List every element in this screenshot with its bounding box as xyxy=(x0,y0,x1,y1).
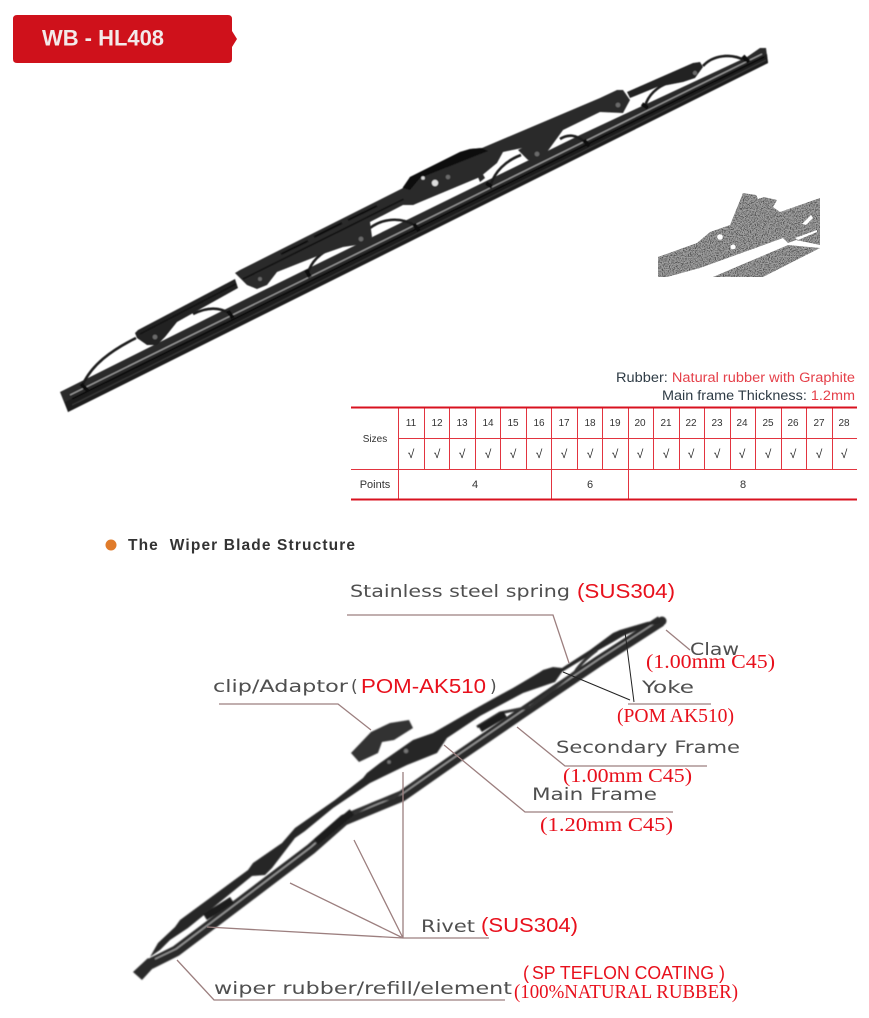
table header numbers: 16 xyxy=(533,418,545,429)
material note: Main frame Thickness: 1.2mm xyxy=(662,388,855,403)
table check marks: √ xyxy=(663,447,670,461)
callout: claw: (1.00mm C45) xyxy=(646,651,775,673)
table header numbers: 26 xyxy=(787,418,799,429)
callout: secondary frame: Secondary Frame xyxy=(556,738,740,758)
callout: claw: Claw xyxy=(690,640,739,660)
table check marks: √ xyxy=(612,447,619,461)
callout: wiper rubber: SP TEFLON COATING xyxy=(532,963,714,983)
table check marks: √ xyxy=(688,447,695,461)
callout: stainless steel spring: Stainless steel spring xyxy=(350,582,570,602)
callout: stainless steel spring xyxy=(347,581,675,663)
table header numbers: 12 xyxy=(431,418,443,429)
table header numbers: 20 xyxy=(634,418,646,429)
table header numbers: 13 xyxy=(456,418,468,429)
callout: yoke: Yoke xyxy=(641,678,694,698)
inset: graphite rubber texture sample xyxy=(658,193,820,277)
table header numbers: 28 xyxy=(838,418,850,429)
table check marks: √ xyxy=(816,447,823,461)
table check marks: √ xyxy=(714,447,721,461)
product label badge: WB - HL408 xyxy=(42,26,164,50)
table header numbers: 27 xyxy=(813,418,825,429)
table check marks: √ xyxy=(637,447,644,461)
clip highlights on frame xyxy=(387,749,408,764)
section heading: The Wiper Blade Structure xyxy=(128,537,355,554)
springs xyxy=(83,56,746,384)
callout: yoke: (POM AK510) xyxy=(617,705,734,727)
material note: Rubber: Natural rubber with Graphite xyxy=(616,370,855,385)
callout: wiper rubber xyxy=(177,960,738,1003)
product label badge xyxy=(13,15,237,63)
product photo: wiper blade xyxy=(60,48,768,412)
callout: clip adaptor: clip/Adaptor xyxy=(213,677,348,697)
clip holes xyxy=(421,176,438,186)
table check marks: √ xyxy=(841,447,848,461)
right yoke xyxy=(627,62,703,98)
callout: clip adaptor xyxy=(213,676,497,730)
callout: secondary frame: (1.00mm C45) xyxy=(563,765,692,787)
callout: wiper rubber: ( xyxy=(523,963,529,983)
table header numbers: 25 xyxy=(762,418,774,429)
secondary yokes xyxy=(205,714,505,917)
textured shape xyxy=(658,193,820,277)
callout: yoke xyxy=(563,632,734,727)
table header numbers: 19 xyxy=(609,418,621,429)
callout: main frame: (1.20mm C45) xyxy=(540,814,673,836)
table check marks: √ xyxy=(790,447,797,461)
callout: secondary frame xyxy=(517,727,740,787)
callout: main frame xyxy=(444,745,673,836)
table check marks: √ xyxy=(459,447,466,461)
slots on frame xyxy=(281,104,596,254)
table check marks xyxy=(408,447,848,461)
inset holes xyxy=(717,215,817,250)
callout: wiper rubber: wiper rubber/refill/element xyxy=(214,979,512,999)
callout: rivet: Rivet xyxy=(421,917,475,937)
dark clip loop xyxy=(403,148,488,190)
first yoke xyxy=(135,279,238,345)
table check marks: √ xyxy=(408,447,415,461)
table row labels and point values: 6 xyxy=(587,479,593,491)
callout: rivet: (SUS304) xyxy=(481,915,578,937)
rivets and holes xyxy=(153,71,697,339)
table check marks: √ xyxy=(587,447,594,461)
second yoke xyxy=(235,170,440,289)
callout: claw xyxy=(646,630,775,673)
callout: clip adaptor: ) xyxy=(490,677,497,697)
upper frame xyxy=(150,620,660,957)
table header numbers: 11 xyxy=(406,418,417,429)
rail body xyxy=(150,621,661,964)
table check marks: √ xyxy=(510,447,517,461)
secondary frame xyxy=(315,650,597,842)
callout: wiper rubber: (100%NATURAL RUBBER) xyxy=(514,981,738,1003)
table header numbers: 23 xyxy=(711,418,723,429)
rail highlight xyxy=(155,623,655,959)
table header numbers: 15 xyxy=(507,418,519,429)
table header numbers: 21 xyxy=(660,418,672,429)
table row labels and point values: Sizes xyxy=(363,434,387,445)
spring clips on rail xyxy=(81,56,749,391)
table header numbers: 24 xyxy=(736,418,748,429)
table header numbers: 18 xyxy=(584,418,596,429)
size and points table xyxy=(351,406,857,500)
clip adaptor xyxy=(351,720,413,762)
callout: wiper rubber: ) xyxy=(719,963,725,983)
callout: main frame: Main Frame xyxy=(532,785,657,805)
callout: rivet xyxy=(207,772,578,938)
table check marks: √ xyxy=(485,447,492,461)
table row labels and point values xyxy=(360,434,746,491)
material note xyxy=(616,370,855,403)
hook xyxy=(475,171,485,182)
callout: clip adaptor: POM-AK510 xyxy=(361,676,486,698)
table check marks: √ xyxy=(434,447,441,461)
table check marks: √ xyxy=(561,447,568,461)
table header numbers: 22 xyxy=(685,418,697,429)
table check marks: √ xyxy=(536,447,543,461)
rail tip and knob xyxy=(133,616,666,980)
table row labels and point values: 8 xyxy=(740,479,746,491)
table row labels and point values: Points xyxy=(360,479,391,491)
callout: clip adaptor: ( xyxy=(351,677,358,697)
table header numbers: 14 xyxy=(482,418,494,429)
table check marks: √ xyxy=(739,447,746,461)
table check marks: √ xyxy=(765,447,772,461)
structure diagram: wiper blade xyxy=(133,616,666,980)
central clip housing xyxy=(400,90,630,205)
rail xyxy=(60,48,768,412)
table header numbers xyxy=(406,418,850,429)
table header numbers: 17 xyxy=(558,418,570,429)
table row labels and point values: 4 xyxy=(472,479,478,491)
callout: stainless steel spring: (SUS304) xyxy=(577,581,675,603)
